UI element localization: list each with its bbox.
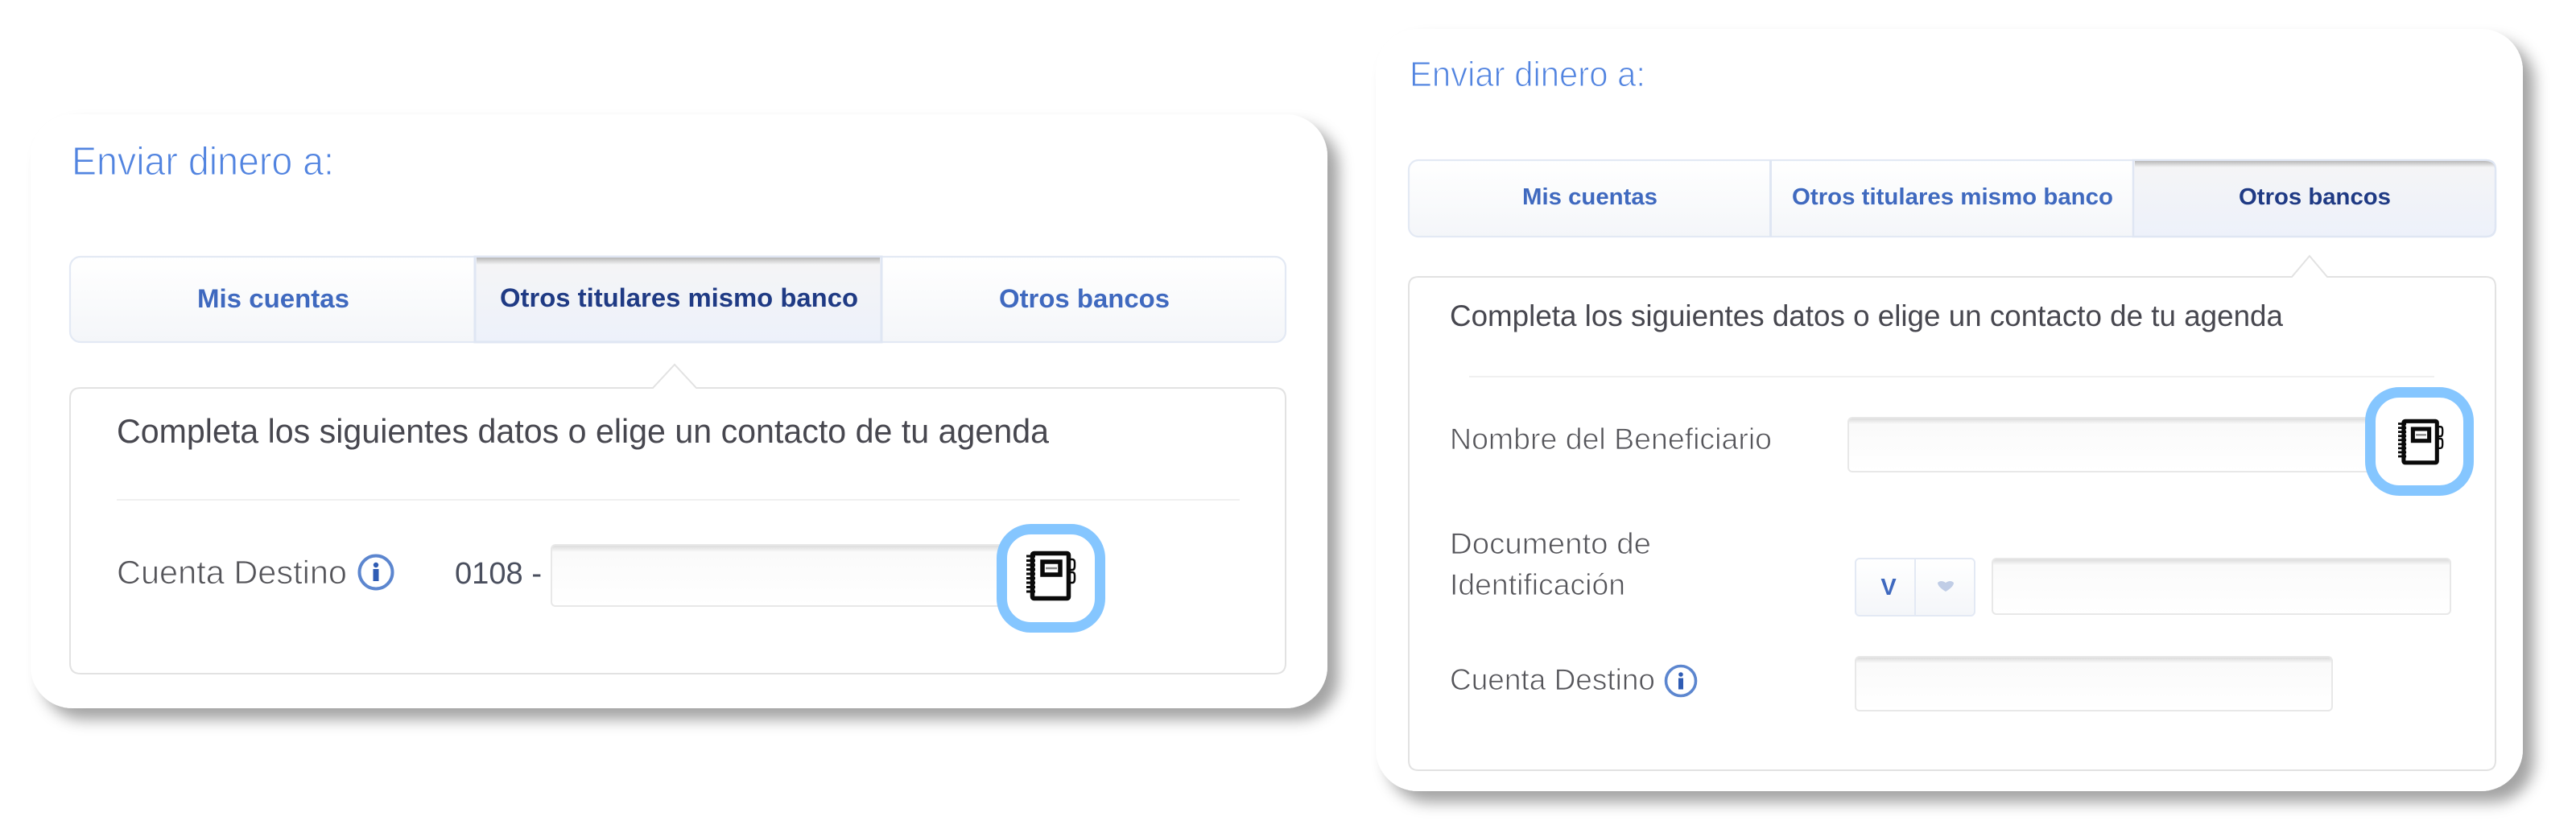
bank prefix: 0108 - xyxy=(455,557,542,591)
input: cuenta destino xyxy=(1856,657,2332,711)
tab bar xyxy=(70,257,1286,342)
input: document number xyxy=(1992,559,2450,614)
card background xyxy=(31,114,1327,708)
tab: otros bancos: Otros bancos xyxy=(999,284,1170,313)
label: documento de identificacion: Documento de xyxy=(1450,527,1651,560)
select: document type xyxy=(1856,559,1975,616)
panel: right card, otros bancos xyxy=(1376,29,2523,791)
highlight: agenda button xyxy=(1001,530,1100,628)
form panel xyxy=(70,365,1286,674)
input: nombre del beneficiario xyxy=(1848,418,2412,472)
highlight: agenda button xyxy=(2370,393,2468,491)
tab bar xyxy=(1409,160,2496,237)
select value: V xyxy=(1880,575,1897,600)
label: cuenta destino: Cuenta Destino xyxy=(1450,663,1655,696)
heading: enviar dinero a: Enviar dinero a: xyxy=(1410,55,1645,94)
icon: dropdown chevron xyxy=(1938,581,1954,592)
tab: mis cuentas: Mis cuentas xyxy=(1522,184,1657,210)
instructions: Completa los siguientes datos o elige un contacto de tu agenda xyxy=(1450,299,2283,332)
tab: otros titulares mismo banco (active): Otros titulares mismo banco xyxy=(500,283,858,312)
icon: notebook xyxy=(1026,554,1075,599)
label: identificacion: Identificación xyxy=(1450,568,1625,601)
card background xyxy=(1376,29,2523,791)
label: nombre del beneficiario: Nombre del Beneficiario xyxy=(1450,423,1772,456)
form panel xyxy=(1409,256,2496,770)
icon: notebook xyxy=(2398,421,2442,463)
icon: info xyxy=(359,555,393,589)
label: cuenta destino: Cuenta Destino xyxy=(117,554,347,591)
icon: info xyxy=(1666,666,1695,695)
tab: otros titulares mismo banco: Otros titulares mismo banco xyxy=(1792,184,2113,210)
tab: mis cuentas: Mis cuentas xyxy=(197,284,349,313)
instructions: Completa los siguientes datos o elige un contacto de tu agenda xyxy=(117,412,1050,450)
active tab background xyxy=(2133,160,2496,237)
tab: otros bancos (active): Otros bancos xyxy=(2239,184,2391,210)
heading: enviar dinero a: Enviar dinero a: xyxy=(72,140,334,184)
panel: left card, otros titulares mismo banco xyxy=(31,114,1327,708)
input: cuenta destino xyxy=(551,545,1014,606)
active tab background xyxy=(475,257,881,342)
